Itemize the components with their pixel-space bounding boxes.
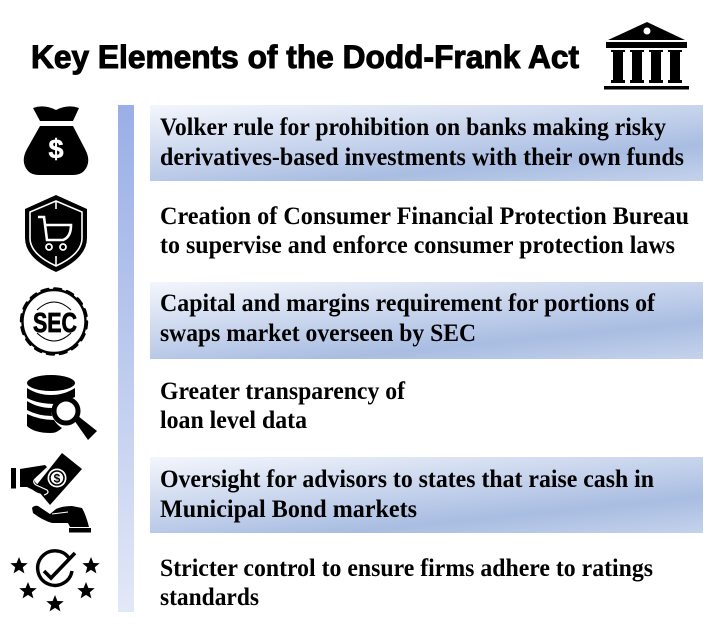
panel: capital and margins bbox=[150, 282, 703, 359]
text block: loan level data bbox=[160, 378, 406, 434]
panel: municipal advisors bbox=[150, 457, 703, 533]
title: Key Elements of the Dodd-Frank Act bbox=[31, 39, 579, 75]
text block: Consumer Financial Protection Bureau: Creation of Consumer Financial Protection Bureau bbox=[160, 203, 689, 230]
icon: SEC seal: SEC bbox=[33, 307, 77, 338]
vertical gradient bar bbox=[118, 105, 134, 612]
panel: Volker rule bbox=[150, 105, 703, 181]
icon: shopping cart shield bbox=[25, 195, 87, 272]
text block: loan level data: Greater transparency of bbox=[160, 378, 406, 405]
icon: money bag bbox=[24, 106, 88, 175]
text block: Consumer Financial Protection Bureau: to supervise and enforce consumer protection laws bbox=[160, 232, 675, 259]
icon: government building bbox=[604, 22, 689, 90]
text block: loan level data: loan level data bbox=[160, 407, 307, 434]
panel: capital and margins: swaps market overseen by SEC bbox=[160, 320, 476, 347]
icon: hands exchanging money bbox=[11, 453, 91, 532]
icon: SEC seal bbox=[21, 288, 87, 354]
panel: municipal advisors: Oversight for advisors to states that raise cash in bbox=[160, 466, 654, 493]
text block: ratings standards: Stricter control to ensure firms adhere to ratings bbox=[160, 555, 653, 582]
text block: Consumer Financial Protection Bureau bbox=[160, 203, 689, 259]
panel: Volker rule: Volker rule for prohibition on banks making risky bbox=[160, 114, 666, 141]
icon: check mark with stars bbox=[10, 551, 100, 611]
icon: hands exchanging money: $ bbox=[54, 472, 61, 486]
icon: money bag: $ bbox=[48, 134, 64, 164]
panel: Volker rule: derivatives-based investments with their own funds bbox=[160, 144, 684, 171]
panel: capital and margins: Capital and margins requirement for portions of bbox=[160, 290, 656, 317]
text block: ratings standards bbox=[160, 555, 653, 611]
panel: municipal advisors: Municipal Bond markets bbox=[160, 496, 417, 523]
text block: ratings standards: standards bbox=[160, 584, 259, 611]
icon: database with magnifier bbox=[27, 375, 97, 440]
